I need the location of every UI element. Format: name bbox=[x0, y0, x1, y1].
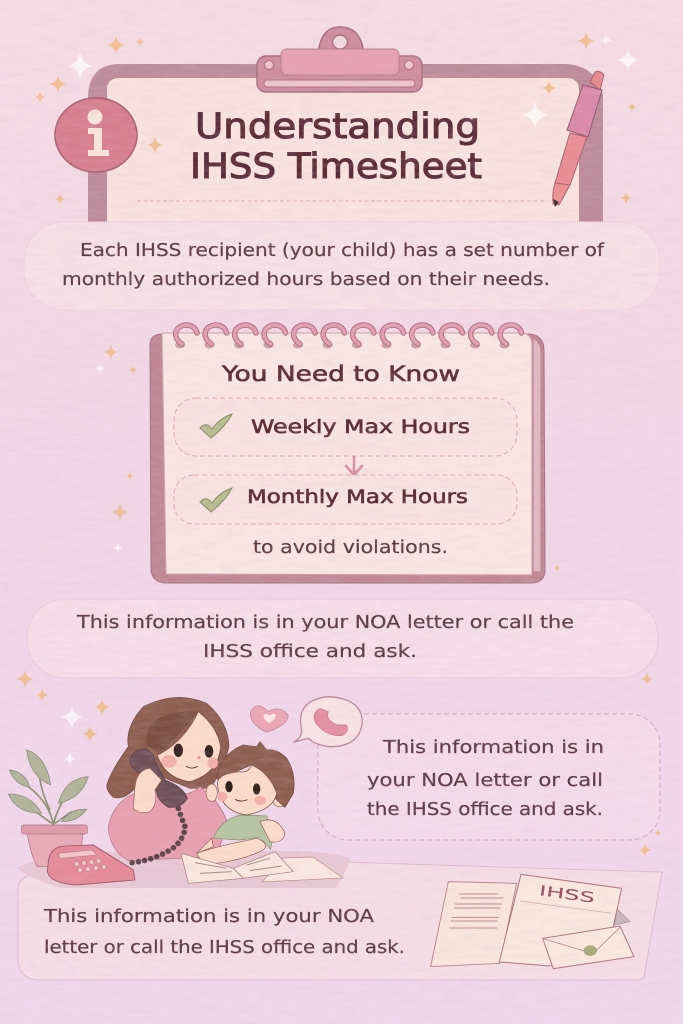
icon: info badge bbox=[55, 98, 137, 172]
dashed callout bbox=[318, 714, 660, 840]
sparkles bbox=[16, 32, 662, 856]
bottom panel bbox=[18, 862, 662, 980]
bottom panel: letter or call the IHSS office and ask. bbox=[44, 938, 405, 958]
desk bbox=[16, 851, 350, 888]
monthly max hours row: Monthly Max Hours bbox=[247, 486, 468, 508]
intro bubble: Each IHSS recipient (your child) has a set number of bbox=[80, 240, 605, 261]
icon: pen bbox=[553, 71, 604, 207]
spiral rings bbox=[175, 325, 522, 348]
NOA bubble bbox=[27, 599, 658, 678]
phone cord bbox=[132, 808, 185, 863]
title: Understanding bbox=[195, 107, 480, 147]
heart highlight bbox=[264, 714, 276, 723]
NOA bubble: This information is in your NOA letter or call the bbox=[76, 613, 574, 633]
intro bubble bbox=[24, 222, 660, 310]
title: IHSS Timesheet bbox=[190, 147, 482, 187]
dashed callout: your NOA letter or call bbox=[367, 771, 603, 791]
dashed callout: the IHSS office and ask. bbox=[367, 800, 603, 820]
monthly max hours row bbox=[174, 475, 517, 524]
illustration: mother and child on phone bbox=[107, 697, 343, 883]
closing note: to avoid violations. bbox=[253, 538, 448, 558]
clipboard clip bbox=[257, 27, 422, 92]
clipboard header bbox=[55, 27, 604, 222]
child bbox=[197, 742, 294, 863]
illustration: documents and envelope bbox=[431, 874, 634, 969]
icon: phone speech bubble bbox=[293, 697, 362, 747]
icon: heart bbox=[250, 706, 288, 732]
illustration: documents and envelope: IHSS bbox=[538, 883, 596, 907]
open book bbox=[181, 852, 343, 883]
plant bbox=[8, 750, 88, 867]
notebook panel bbox=[150, 325, 545, 583]
notebook heading: You Need to Know bbox=[221, 362, 460, 386]
bottom panel: This information is in your NOA bbox=[43, 907, 374, 927]
arrow: down bbox=[346, 457, 362, 475]
intro bubble: monthly authorized hours based on their needs. bbox=[62, 269, 550, 290]
mother bbox=[107, 697, 229, 863]
dashed callout: This information is in bbox=[382, 738, 604, 758]
NOA bubble: IHSS office and ask. bbox=[203, 642, 417, 662]
telephone handset bbox=[130, 748, 187, 807]
title bbox=[190, 107, 482, 187]
weekly max hours row: Weekly Max Hours bbox=[251, 416, 470, 438]
desk telephone bbox=[47, 845, 135, 885]
weekly max hours row bbox=[174, 398, 517, 456]
